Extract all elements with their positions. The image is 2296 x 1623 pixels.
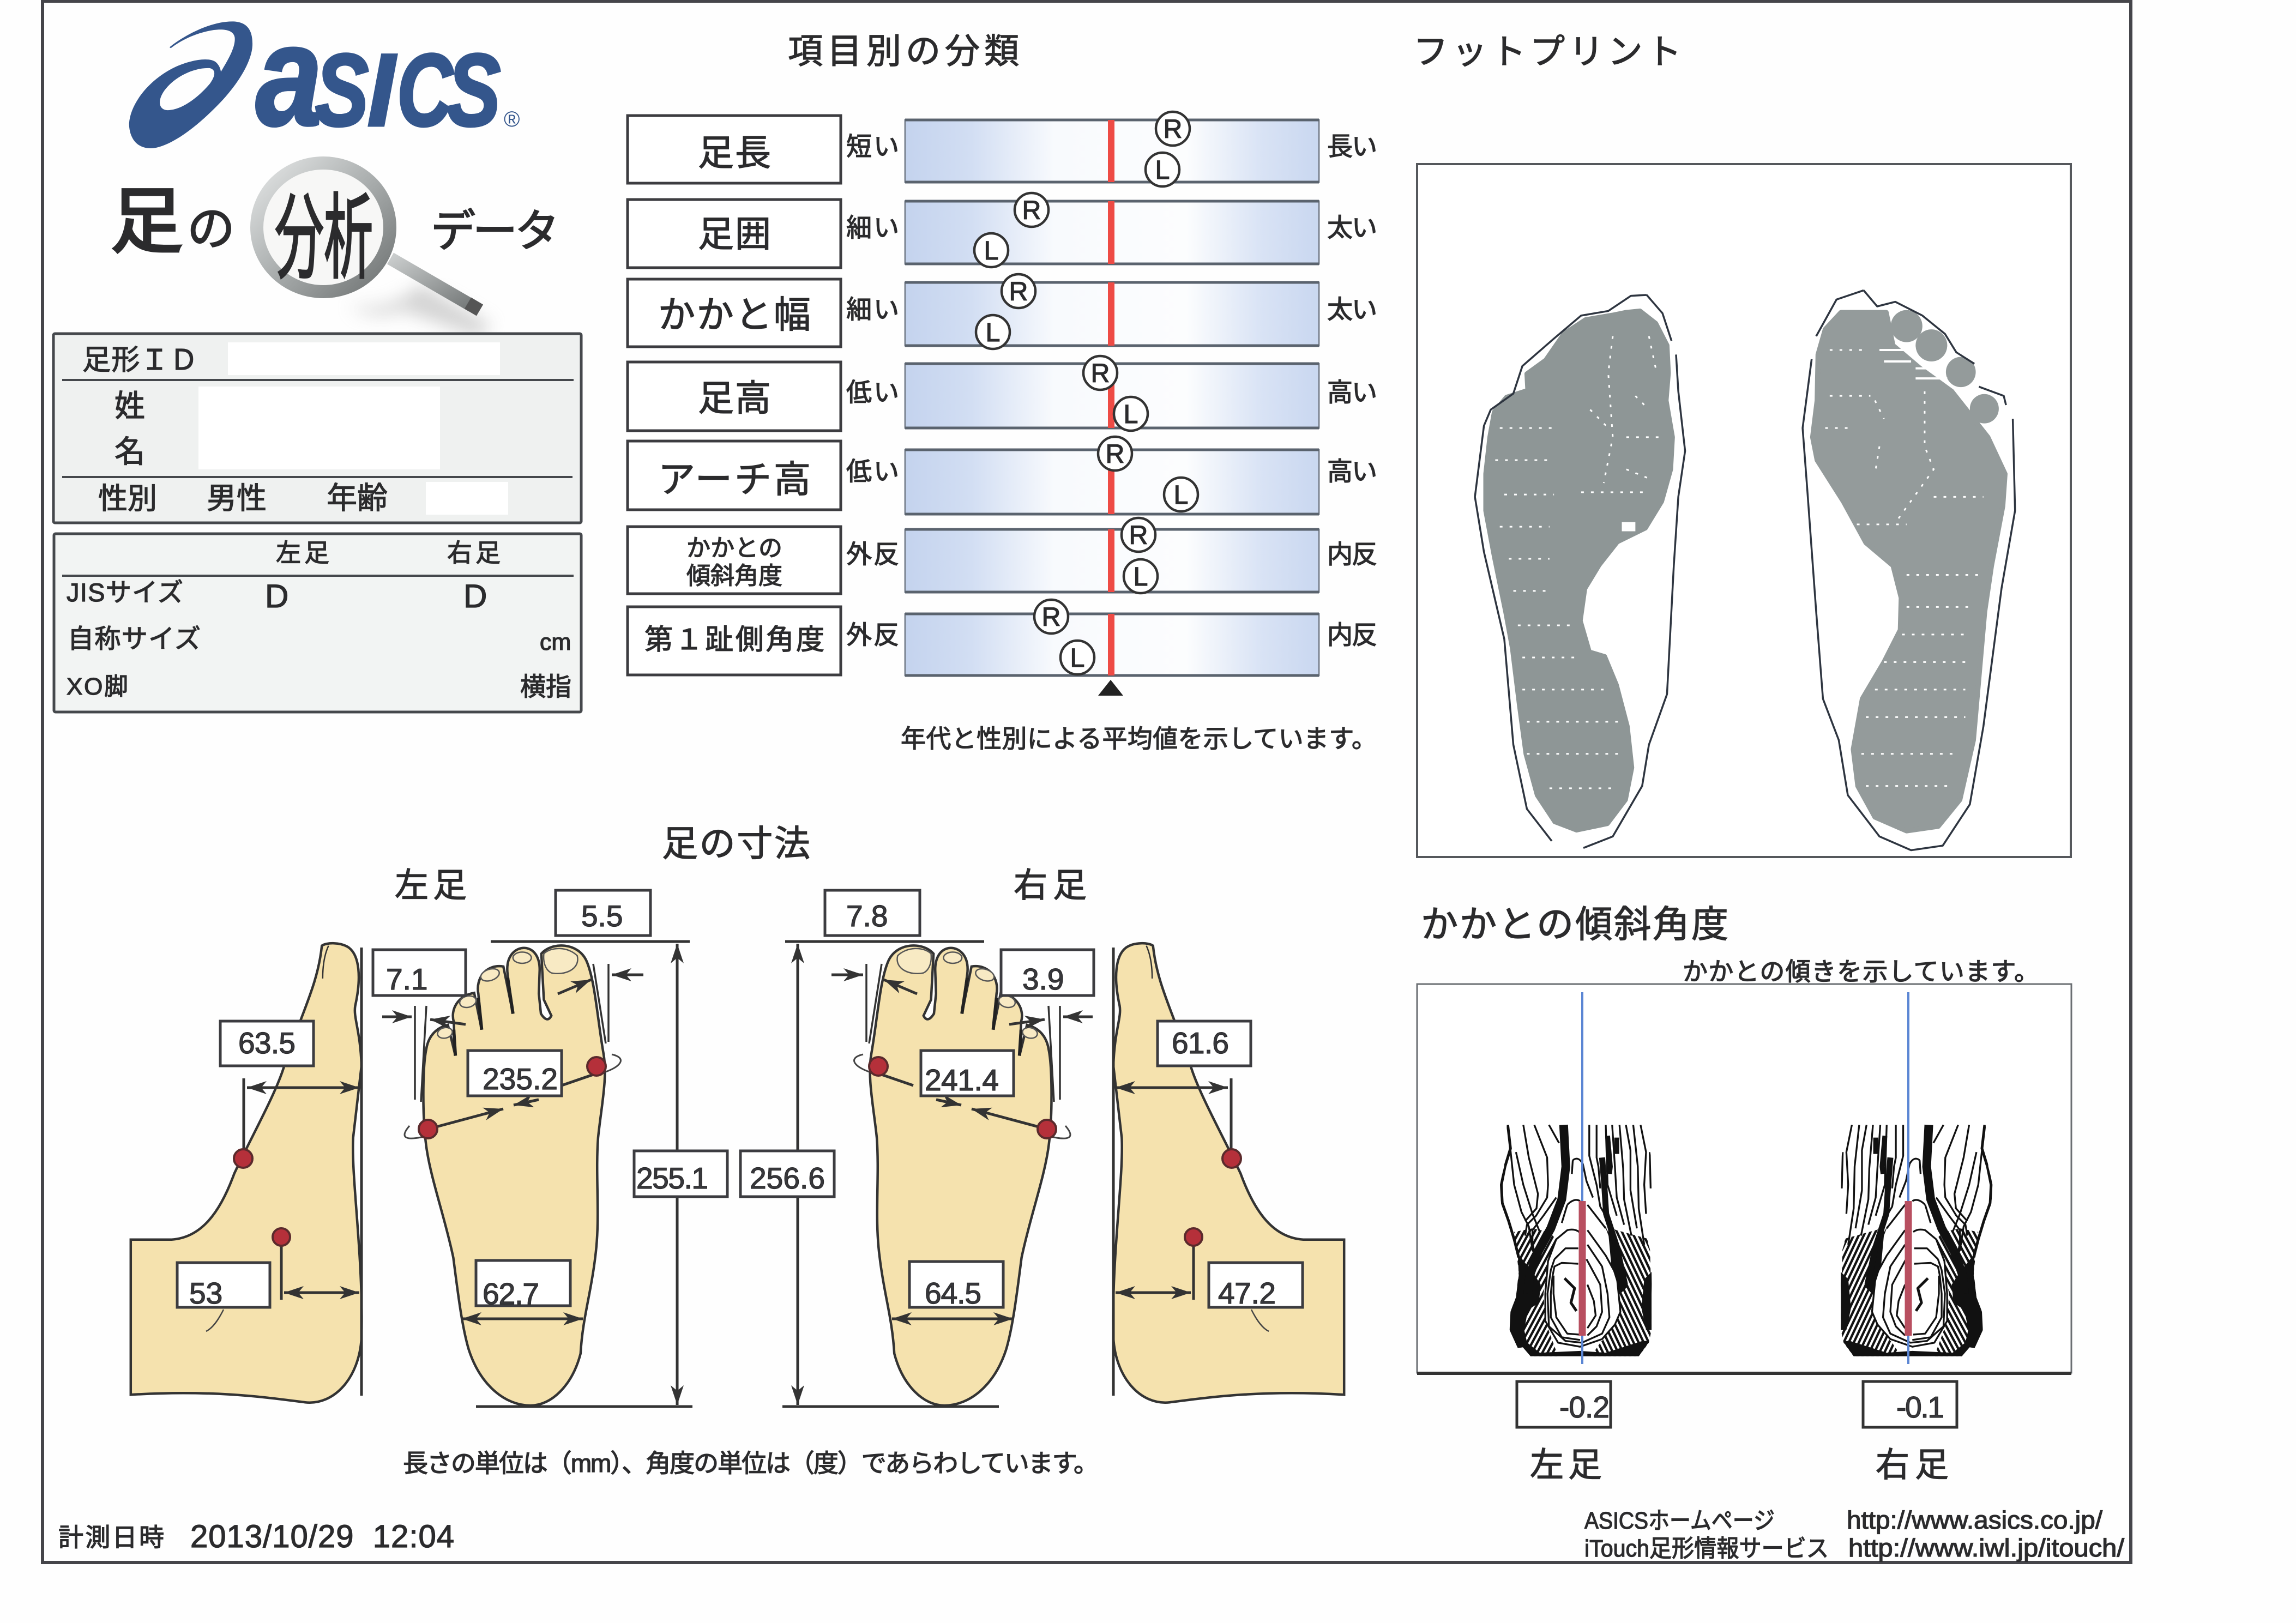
measurement: 255.1: 255.1 xyxy=(636,1161,708,1195)
title: 足の分析データ xyxy=(111,163,559,338)
row: foot height: 高い xyxy=(1327,378,1377,407)
value: left heel angle: -0.2 xyxy=(1559,1390,1610,1424)
row: arch height: L xyxy=(1174,481,1188,510)
logo wordmark: C xyxy=(397,33,454,147)
row: heel width: R xyxy=(1009,277,1028,306)
measurement: 61.6 xyxy=(1158,1021,1251,1066)
heading: left foot: 左足 xyxy=(395,867,467,904)
value: left heel angle xyxy=(1517,1381,1611,1427)
label: age: 年齢 xyxy=(327,481,388,515)
row: foot height: L xyxy=(1124,400,1138,429)
note: units: 長さの単位は（mm）、角度の単位は（度）であらわしています。 xyxy=(403,1449,1099,1477)
measurement: 62.7: 62.7 xyxy=(483,1277,539,1311)
row: foot height: 低い xyxy=(846,378,899,407)
row: heel tilt angle: 内反 xyxy=(1327,540,1377,569)
magnified word 分析: 分析 xyxy=(275,186,373,290)
row: foot height xyxy=(628,356,1377,431)
measurement: 5.5: 5.5 xyxy=(581,899,623,933)
measurement: 63.5 xyxy=(220,1021,314,1066)
row: foot length: L xyxy=(1155,156,1170,185)
icon: asics stripes xyxy=(129,21,252,148)
measurement: 3.9 xyxy=(1001,950,1094,996)
left footprint xyxy=(1475,295,1685,848)
logo wordmark: S xyxy=(447,33,501,147)
magnifier handle end xyxy=(468,303,480,310)
row: foot length: 長い xyxy=(1327,132,1377,161)
measurement: 235.2: 235.2 xyxy=(483,1062,558,1096)
label: foot ID: 足形ＩＤ xyxy=(82,345,198,376)
measurement: 241.4: 241.4 xyxy=(925,1063,999,1097)
note: heel tilt: かかとの傾きを示しています。 xyxy=(1683,957,2039,986)
link label: ASICS homepage: ASICSホームページ xyxy=(1584,1507,1775,1534)
measurement: 3.9: 3.9 xyxy=(1022,962,1064,996)
row: heel width: 太い xyxy=(1327,295,1377,324)
row: first toe angle: L xyxy=(1070,644,1084,673)
panel: size info xyxy=(54,534,581,712)
label: XO leg: XO脚 xyxy=(67,673,128,700)
icon: magnifying glass handle xyxy=(390,258,472,306)
measurement: 7.8: 7.8 xyxy=(846,899,888,933)
registered mark: ® xyxy=(504,107,520,131)
measurement: 7.1 xyxy=(373,950,466,996)
unit: cm: cm xyxy=(540,629,571,655)
measurement: 256.6 xyxy=(740,1151,834,1197)
row: heel tilt angle: 外反 xyxy=(846,540,899,569)
unit: finger widths: 横指 xyxy=(520,672,571,701)
chart: left heel contour xyxy=(1502,1125,1653,1356)
heading glyph 足: 足 xyxy=(111,182,183,262)
measurement: 64.5 xyxy=(909,1262,1003,1310)
label: family name: 姓 xyxy=(115,389,145,423)
row: foot girth xyxy=(628,193,1377,268)
logo wordmark: a xyxy=(256,0,322,155)
row: first toe angle xyxy=(628,600,1377,675)
panel: personal info xyxy=(53,334,581,523)
left foot diagram xyxy=(131,942,692,1407)
row: foot height: 足高 xyxy=(698,378,771,418)
row: foot length xyxy=(628,112,1377,186)
label: JIS size: JISサイズ xyxy=(67,578,183,607)
measurement: 241.4 xyxy=(921,1051,1014,1097)
row: arch height: 低い xyxy=(846,457,899,486)
heading glyph の: の xyxy=(187,202,235,256)
row: arch height xyxy=(628,437,1377,514)
value: measurement date: 2013/10/29 12:04 xyxy=(190,1519,454,1554)
value: right JIS: D xyxy=(463,578,487,614)
label: left foot: 左足 xyxy=(1530,1446,1602,1484)
row: foot girth: L xyxy=(984,237,998,266)
label: measurement date: 計測日時 xyxy=(58,1523,164,1552)
right heel axis lines xyxy=(1907,992,1909,1364)
label: given name: 名 xyxy=(115,435,145,469)
heading: heel tilt angle: かかとの傾斜角度 xyxy=(1421,904,1728,945)
left heel axis lines xyxy=(1581,992,1583,1364)
link text: iwl url: http://www.iwl.jp/itouch/ xyxy=(1848,1534,2124,1562)
row: foot height: R xyxy=(1091,359,1110,388)
row: arch height: R xyxy=(1106,440,1124,469)
heading: foot dimensions: 足の寸法 xyxy=(662,823,810,864)
row: foot girth: 太い xyxy=(1327,213,1377,242)
row: foot girth: R xyxy=(1022,196,1041,225)
row: foot girth: 細い xyxy=(846,213,899,242)
row: heel tilt angle xyxy=(628,518,1377,594)
row: foot length: 足長 xyxy=(698,132,771,173)
heading: footprint: フットプリント xyxy=(1413,32,1682,71)
value: male: 男性 xyxy=(207,481,267,515)
row: heel width: 細い xyxy=(846,295,899,324)
label: sex: 性別 xyxy=(98,482,157,515)
heading: classification by item: 項目別の分類 xyxy=(788,32,1019,71)
row: first toe angle: 第１趾側角度 xyxy=(644,624,824,656)
icon: magnifying glass xyxy=(257,163,390,292)
measurement: 47.2: 47.2 xyxy=(1218,1276,1276,1310)
panel: footprint xyxy=(1417,164,2071,857)
link label: iTouch service: iTouch足形情報サービス xyxy=(1584,1535,1829,1562)
measurement: 5.5 xyxy=(556,890,650,936)
icon: average marker triangle xyxy=(1098,680,1123,696)
row: foot length: R xyxy=(1164,115,1182,144)
footer links xyxy=(1584,1506,2124,1562)
measurement: 7.8 xyxy=(825,890,920,936)
row: heel width: L xyxy=(986,318,1000,347)
row: heel tilt angle: かかとの xyxy=(686,535,782,562)
measurement: 63.5: 63.5 xyxy=(238,1026,296,1060)
row: heel tilt angle: 傾斜角度 xyxy=(686,563,782,589)
row: heel tilt angle: R xyxy=(1129,521,1148,550)
measurement: 7.1: 7.1 xyxy=(386,962,427,996)
column: left foot: 左足 xyxy=(276,539,329,567)
label: right foot: 右足 xyxy=(1876,1446,1949,1484)
row: arch height: アーチ高 xyxy=(658,459,811,500)
row: first toe angle: 外反 xyxy=(846,620,899,649)
magnifier shadow xyxy=(349,283,491,338)
measurement: 53 xyxy=(177,1263,270,1310)
value: right heel angle: -0.1 xyxy=(1896,1390,1944,1424)
logo: asics xyxy=(129,0,520,155)
row: foot length: 短い xyxy=(846,132,899,161)
row: first toe angle: 内反 xyxy=(1327,620,1377,649)
row: heel tilt angle: L xyxy=(1134,563,1148,592)
measurement: 53: 53 xyxy=(189,1276,222,1310)
row: foot girth: 足囲 xyxy=(698,214,771,254)
panel: classification rows xyxy=(628,112,1377,696)
measurement: 256.6: 256.6 xyxy=(750,1161,825,1195)
row: heel width: かかと幅 xyxy=(658,294,811,336)
heading: right foot: 右足 xyxy=(1014,867,1087,904)
logo wordmark xyxy=(256,0,501,155)
measurement: 64.5: 64.5 xyxy=(925,1276,981,1310)
measurement: 47.2 xyxy=(1209,1263,1303,1310)
measurement: 61.6: 61.6 xyxy=(1172,1026,1229,1060)
link text: asics url: http://www.asics.co.jp/ xyxy=(1847,1506,2102,1534)
column: right foot: 右足 xyxy=(447,539,501,567)
measurement: 62.7 xyxy=(476,1260,570,1311)
heading データ: データ xyxy=(431,207,559,256)
measurement: 255.1 xyxy=(634,1151,727,1197)
row: heel width xyxy=(628,274,1377,349)
value: right heel angle xyxy=(1863,1381,1957,1427)
value: left JIS: D xyxy=(265,578,288,614)
row: arch height: 高い xyxy=(1327,457,1377,486)
logo wordmark: S xyxy=(315,33,369,147)
logo wordmark: I xyxy=(367,33,397,147)
right foot diagram xyxy=(782,942,1344,1407)
panel: heel tilt images xyxy=(1417,984,2071,1373)
label: self-reported size: 自称サイズ xyxy=(68,625,201,654)
note: average by age and sex: 年代と性別による平均値を示しています。 xyxy=(901,725,1377,753)
row: first toe angle: R xyxy=(1042,603,1060,632)
right footprint xyxy=(1803,291,2015,850)
measurement: 235.2 xyxy=(468,1051,562,1096)
chart: right heel contour xyxy=(1840,1125,1991,1356)
